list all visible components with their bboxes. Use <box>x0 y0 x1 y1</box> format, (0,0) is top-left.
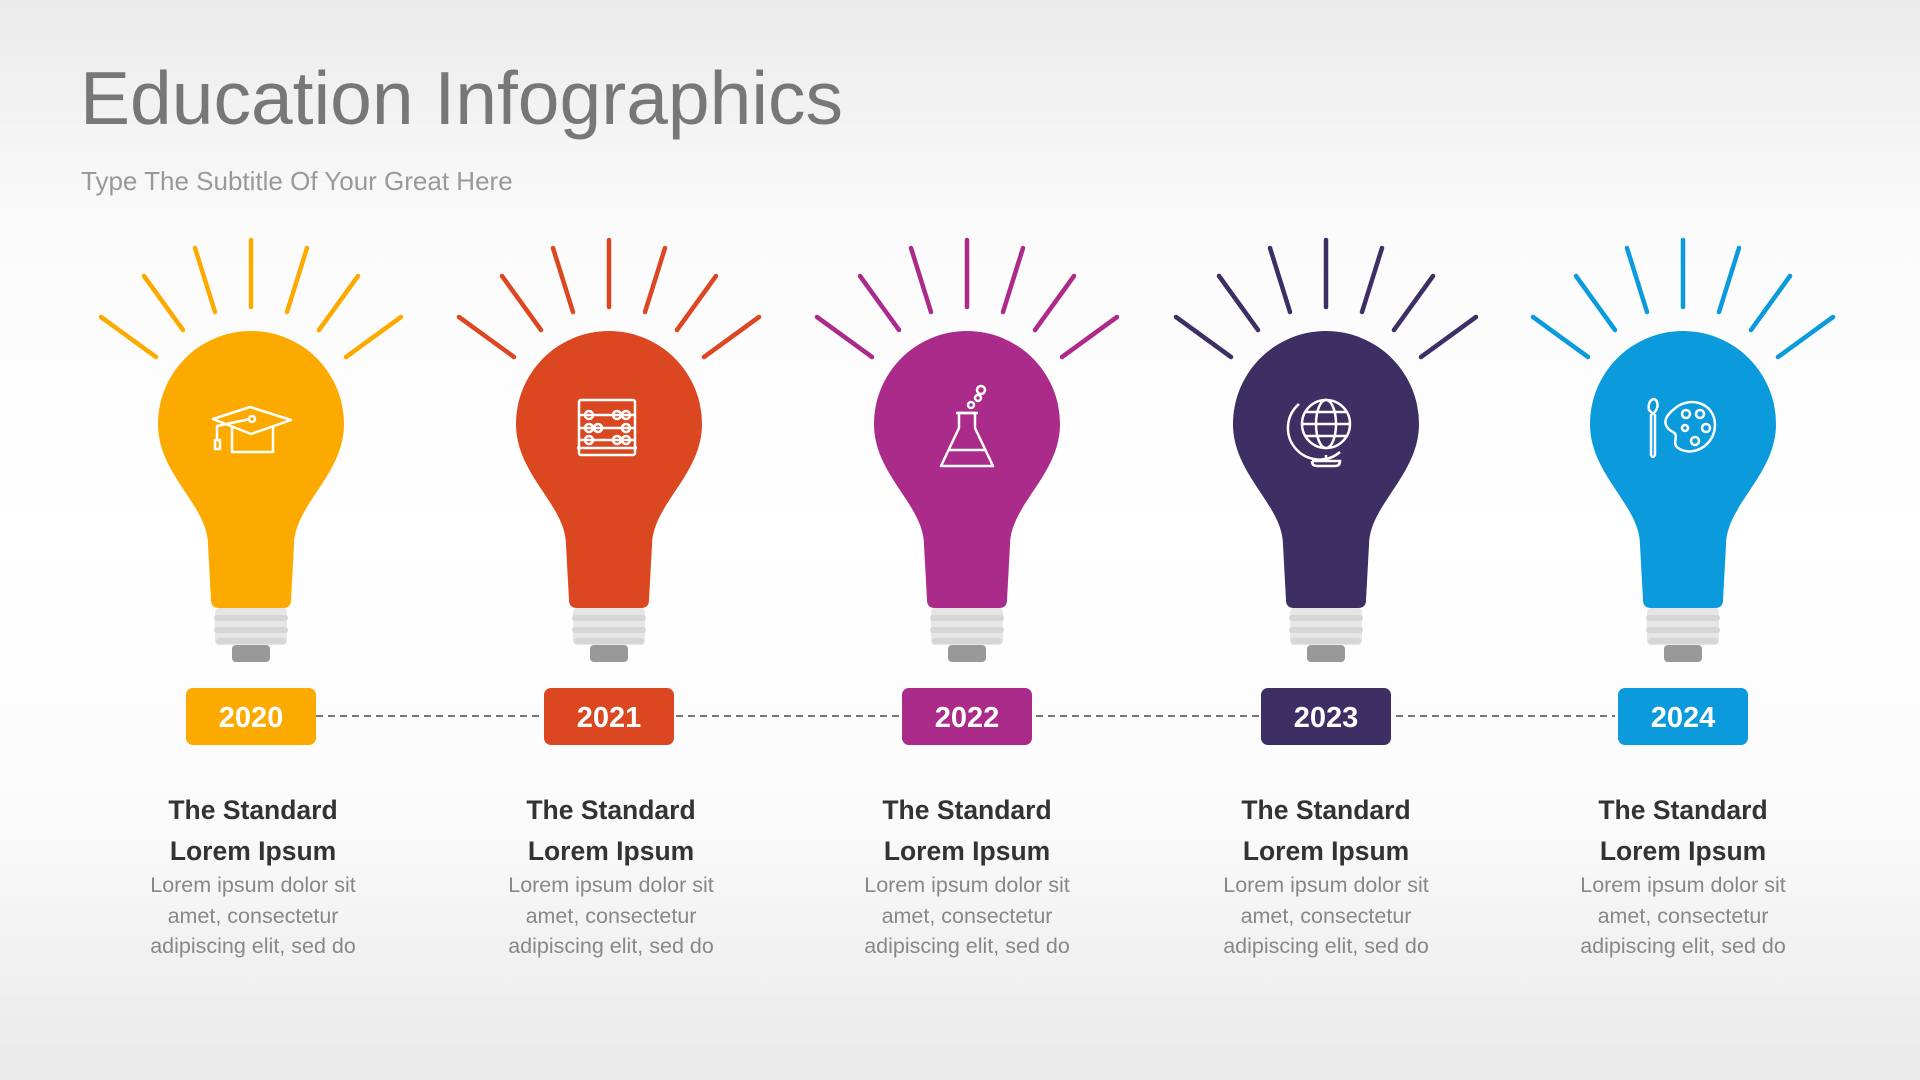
milestone 2023 <box>1176 240 1476 958</box>
milestone 2022 <box>817 240 1117 958</box>
icon: abacus <box>577 400 637 455</box>
milestone 2020: 2020 <box>219 702 283 734</box>
text 2023 <box>1223 795 1429 958</box>
text 2020: amet, consectetur <box>168 904 338 928</box>
text 2022 <box>864 795 1070 958</box>
rays 2022 <box>817 240 1117 357</box>
milestone 2024 <box>1533 240 1833 958</box>
rays 2024 <box>1533 240 1833 357</box>
text 2021: Lorem ipsum dolor sit <box>508 873 714 897</box>
bulb 2024 <box>1590 331 1776 608</box>
milestone 2023: 2023 <box>1294 702 1358 734</box>
text 2021 <box>508 795 714 958</box>
text 2024: amet, consectetur <box>1598 904 1768 928</box>
bulb 2022 <box>874 331 1060 608</box>
text 2020: The Standard <box>168 795 338 825</box>
dashed timeline <box>316 715 1615 717</box>
text 2024: Lorem Ipsum <box>1600 836 1766 866</box>
text 2024 <box>1580 795 1786 958</box>
text 2020: adipiscing elit, sed do <box>150 934 356 958</box>
text 2024: Lorem ipsum dolor sit <box>1580 873 1786 897</box>
year 2024 <box>1618 688 1748 745</box>
text 2021: Lorem Ipsum <box>528 836 694 866</box>
text 2020 <box>150 795 356 958</box>
text 2022: Lorem Ipsum <box>884 836 1050 866</box>
year 2021 <box>544 688 674 745</box>
year 2020 <box>186 688 316 745</box>
rays 2020 <box>101 240 401 357</box>
year 2023 <box>1261 688 1391 745</box>
text 2021: The Standard <box>526 795 696 825</box>
text 2022: The Standard <box>882 795 1052 825</box>
text 2023: amet, consectetur <box>1241 904 1411 928</box>
text 2021: adipiscing elit, sed do <box>508 934 714 958</box>
title: Education Infographics <box>80 56 843 140</box>
milestone 2024: 2024 <box>1651 702 1715 734</box>
text 2020: Lorem ipsum dolor sit <box>150 873 356 897</box>
milestone 2022: 2022 <box>935 702 999 734</box>
milestone 2021: 2021 <box>577 702 641 734</box>
bulb 2021 <box>516 331 702 608</box>
year 2022 <box>902 688 1032 745</box>
text 2021: amet, consectetur <box>526 904 696 928</box>
milestone 2021 <box>459 240 759 958</box>
text 2023: Lorem Ipsum <box>1243 836 1409 866</box>
text 2022: Lorem ipsum dolor sit <box>864 873 1070 897</box>
milestone 2020 <box>101 240 401 958</box>
icon: globe <box>1288 400 1350 466</box>
rays 2023 <box>1176 240 1476 357</box>
icon: flask <box>941 386 993 466</box>
rays 2021 <box>459 240 759 357</box>
text 2022: amet, consectetur <box>882 904 1052 928</box>
text 2024: adipiscing elit, sed do <box>1580 934 1786 958</box>
text 2022: adipiscing elit, sed do <box>864 934 1070 958</box>
bulb 2020 <box>158 331 344 608</box>
text 2023: Lorem ipsum dolor sit <box>1223 873 1429 897</box>
text 2020: Lorem Ipsum <box>170 836 336 866</box>
text 2024: The Standard <box>1598 795 1768 825</box>
text 2023: The Standard <box>1241 795 1411 825</box>
icon: palette and brush <box>1649 399 1715 457</box>
bulb 2023 <box>1233 331 1419 608</box>
text 2023: adipiscing elit, sed do <box>1223 934 1429 958</box>
subtitle: Type The Subtitle Of Your Great Here <box>81 166 513 196</box>
icon: graduation cap <box>213 407 291 452</box>
